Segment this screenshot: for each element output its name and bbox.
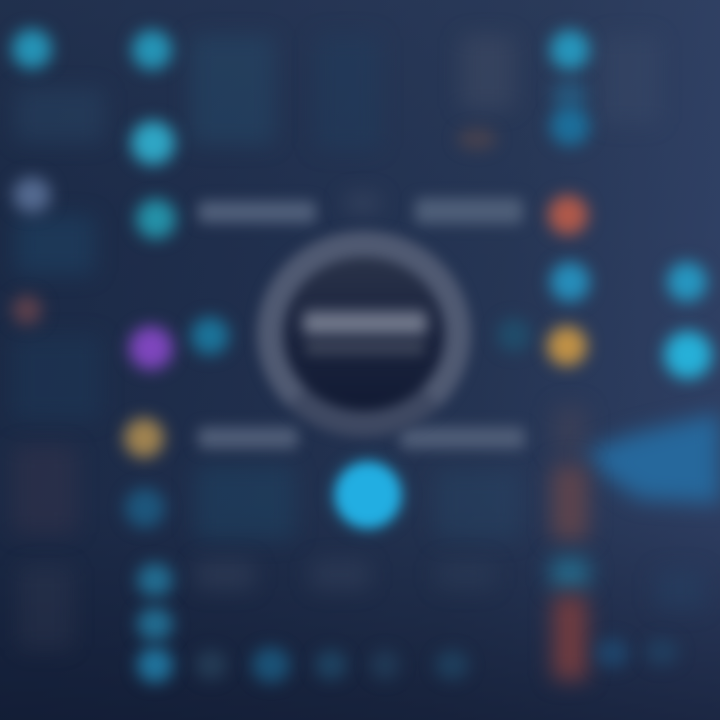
panel: top centre columns	[193, 38, 512, 154]
text block: column three	[460, 35, 515, 110]
stack dot one	[137, 563, 173, 597]
icon: second column teal circle one	[132, 30, 172, 70]
dot one	[195, 650, 227, 680]
central sub-label shadow	[305, 341, 425, 355]
icon: purple circle	[129, 326, 173, 370]
dot five	[435, 650, 469, 680]
chart: right vertical bars	[540, 408, 600, 692]
icon: far right blue circle	[667, 262, 707, 302]
icon: top right teal circle	[550, 30, 590, 70]
icon: red-orange circle	[548, 195, 588, 235]
row cluster: bottom left	[18, 565, 73, 650]
icon: right column blue circle	[550, 106, 590, 146]
bar: faded top	[553, 405, 587, 455]
heading: lower left bar	[198, 427, 298, 449]
area shape	[584, 413, 720, 503]
central label bar	[303, 311, 427, 335]
small marker: column three	[457, 128, 497, 150]
dot right	[645, 638, 679, 666]
panel: lower centre blocks	[199, 470, 472, 536]
faint block	[655, 570, 705, 610]
bar: muted brown	[552, 465, 588, 540]
chart: blue area chart	[582, 406, 720, 514]
heading: upper centre tick	[345, 195, 380, 211]
ring	[257, 231, 471, 437]
dot two	[252, 647, 290, 683]
row cluster: middle left	[15, 215, 95, 275]
dot four	[370, 650, 400, 680]
column two label	[310, 560, 370, 590]
icon: top left teal circle	[12, 29, 52, 69]
icon: right of ring faint circle	[497, 318, 531, 352]
heading: lower right bar	[400, 427, 525, 449]
dot left	[595, 638, 629, 668]
panel: left column faint rows	[16, 93, 99, 640]
row cluster: lower left	[12, 445, 77, 535]
column one label	[195, 560, 255, 590]
stack dot three	[137, 647, 173, 683]
panel: upper right text	[600, 35, 660, 125]
icon: left column gray circle	[13, 177, 51, 213]
icon: second column teal circle two	[131, 121, 175, 165]
panel: bottom right dots	[592, 635, 676, 672]
stack dot two	[137, 607, 173, 641]
icon: left column muted red circle	[12, 295, 42, 325]
icon: dark teal circle	[125, 488, 165, 528]
icon: second column teal circle three	[136, 199, 176, 239]
block: right	[435, 470, 520, 540]
icon: far right bright circle	[664, 331, 712, 379]
icon: blue circle beside ring	[191, 317, 229, 355]
block: left	[195, 465, 295, 540]
icon stack: bottom second column	[128, 555, 182, 692]
row cluster: upper left	[15, 88, 105, 143]
icon: right column blue circle two	[550, 262, 590, 302]
heading: upper left bar	[198, 201, 316, 223]
bar: teal	[551, 558, 589, 588]
column three label	[435, 560, 495, 590]
panel: bottom centre columns	[194, 564, 470, 690]
bar: red	[553, 595, 587, 680]
icon: bright blue circle	[335, 462, 401, 528]
heading: upper right bar	[415, 198, 523, 224]
central ring with label	[252, 226, 476, 440]
text block: column one	[190, 35, 275, 145]
icon: right column mid teal	[552, 80, 588, 110]
text block: column two	[315, 35, 380, 150]
dot three	[315, 650, 347, 680]
row cluster: lower middle left	[12, 335, 102, 420]
icon: amber circle	[124, 418, 164, 458]
icon: amber circle right	[547, 326, 587, 366]
